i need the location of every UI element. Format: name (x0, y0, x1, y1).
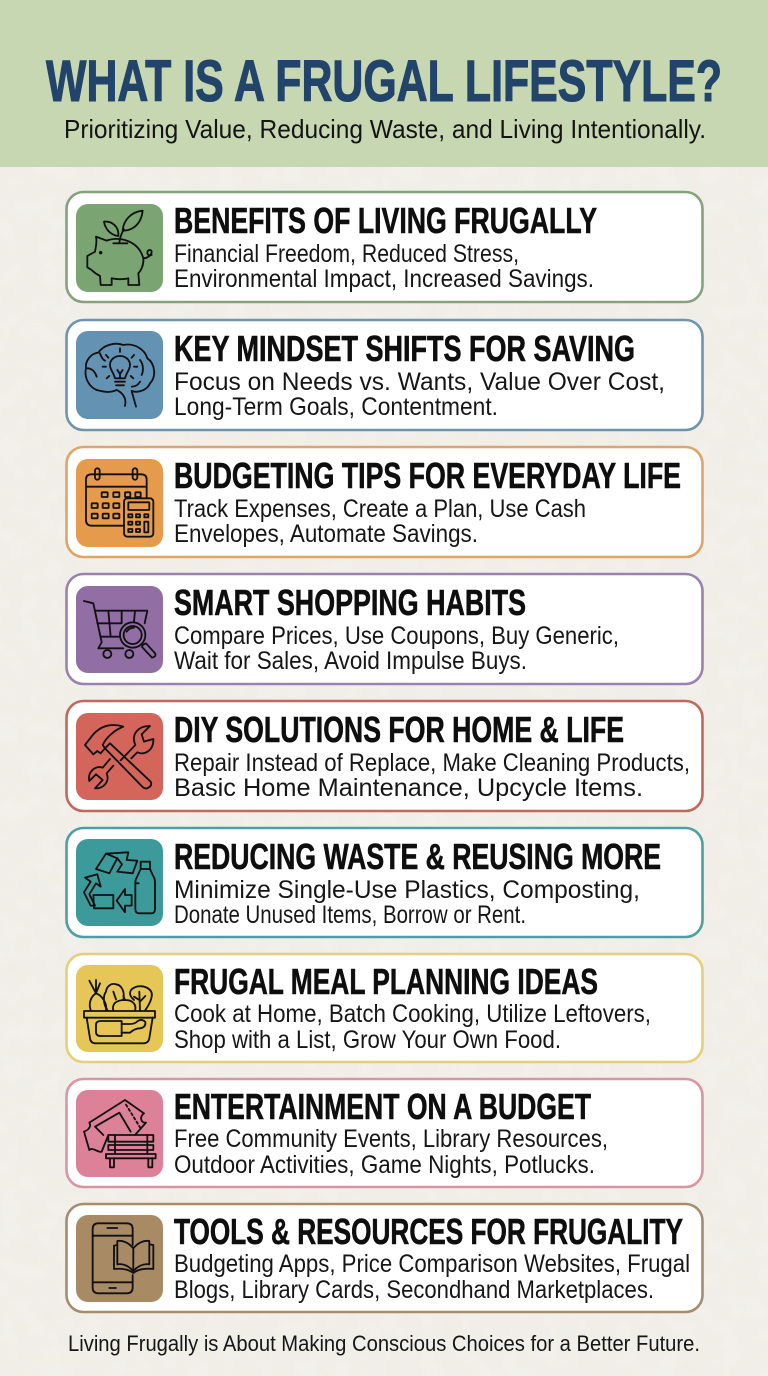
description (174, 368, 665, 421)
description: Financial Freedom, Reduced Stress, (174, 240, 519, 268)
panel: benefits (66, 192, 702, 302)
description (174, 495, 586, 548)
description (174, 876, 640, 929)
icon: cart with magnifier (76, 586, 163, 673)
panel: waste (66, 828, 702, 937)
description: Compare Prices, Use Coupons, Buy Generic, (174, 622, 619, 650)
icon: basket of vegetables (76, 965, 163, 1052)
panel: tools (66, 1204, 702, 1312)
description (174, 240, 594, 293)
icon: ticket and bench (76, 1090, 163, 1177)
description: Outdoor Activities, Game Nights, Potlucks. (174, 1151, 595, 1179)
description: Wait for Sales, Avoid Impulse Buys. (174, 647, 527, 675)
description: Track Expenses, Create a Plan, Use Cash (174, 495, 586, 523)
description: Envelopes, Automate Savings. (174, 520, 478, 548)
icon: hammer and wrench (76, 713, 163, 800)
description: Repair Instead of Replace, Make Cleaning Products, (174, 749, 690, 777)
description: Free Community Events, Library Resources, (174, 1125, 608, 1153)
heading: BENEFITS OF LIVING FRUGALLY (174, 200, 597, 241)
description (174, 1250, 690, 1304)
header band (0, 0, 768, 167)
icon: calendar and calculator (76, 459, 163, 547)
description (174, 622, 619, 675)
description: Donate Unused Items, Borrow or Rent. (174, 901, 526, 929)
description: Environmental Impact, Increased Savings. (174, 265, 594, 293)
description: Cook at Home, Batch Cooking, Utilize Leftovers, (174, 1000, 651, 1028)
icon: phone with open book (76, 1215, 163, 1302)
description (174, 1000, 651, 1054)
description: Shop with a List, Grow Your Own Food. (174, 1026, 561, 1054)
panel: DIY (66, 701, 702, 811)
subtitle: Prioritizing Value, Reducing Waste, and Living Intentionally. (64, 114, 706, 144)
heading: ENTERTAINMENT ON A BUDGET (174, 1086, 591, 1127)
heading: FRUGAL MEAL PLANNING IDEAS (174, 961, 598, 1002)
description (174, 749, 690, 802)
panel: mindset (66, 320, 702, 430)
icon: recycling arrows and bottle (76, 839, 163, 926)
panel: shopping (66, 574, 702, 684)
footer tagline: Living Frugally is About Making Conscious Choices for a Better Future. (68, 1331, 700, 1356)
description: Blogs, Library Cards, Secondhand Marketplaces. (174, 1276, 654, 1304)
panel: meals (66, 954, 702, 1062)
description: Basic Home Maintenance, Upcycle Items. (174, 774, 643, 802)
heading: DIY SOLUTIONS FOR HOME & LIFE (174, 709, 624, 750)
description: Focus on Needs vs. Wants, Value Over Cost, (174, 368, 665, 396)
icon: brain with light bulb (76, 331, 163, 419)
description: Long-Term Goals, Contentment. (174, 393, 498, 421)
heading: SMART SHOPPING HABITS (174, 582, 526, 623)
description: Minimize Single-Use Plastics, Composting, (174, 876, 640, 904)
icon: piggy bank with sprout (76, 204, 163, 292)
panel: entertainment (66, 1079, 702, 1187)
description: Budgeting Apps, Price Comparison Websites, Frugal (174, 1250, 690, 1278)
description (174, 1125, 608, 1179)
panel: budgeting (66, 447, 702, 557)
